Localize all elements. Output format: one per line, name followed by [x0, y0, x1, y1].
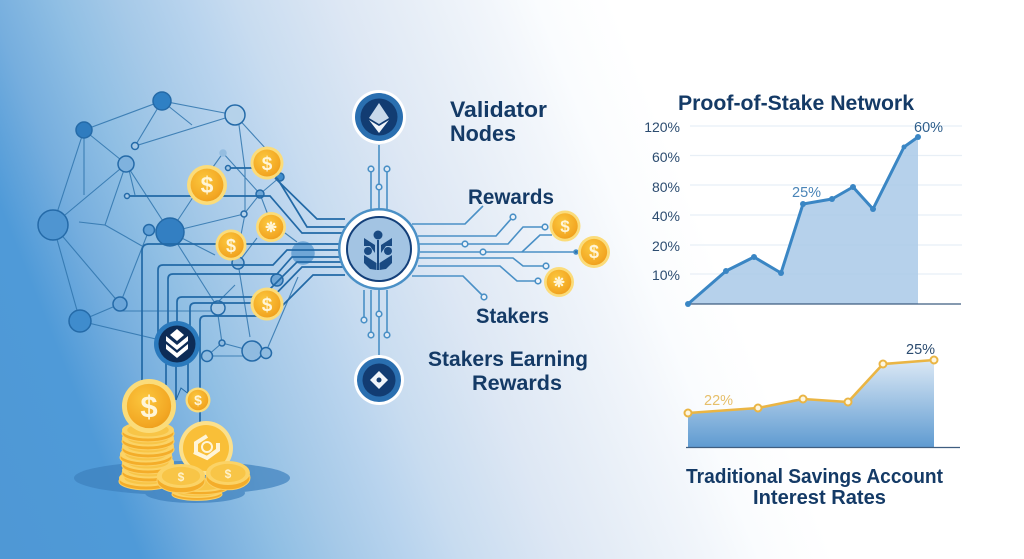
network graph — [38, 92, 314, 362]
hub sprout icon — [364, 230, 392, 270]
validator icon — [352, 90, 406, 144]
dark network node icon — [154, 321, 200, 367]
y axis labels: 120% — [644, 119, 680, 135]
flat coins — [157, 461, 250, 500]
emblem coin — [179, 421, 233, 475]
dollar coins on network: $ — [226, 236, 236, 256]
line series — [688, 360, 934, 413]
staker icon — [354, 355, 404, 405]
line series — [688, 137, 918, 304]
baseline — [686, 303, 961, 305]
proof-of-stake chart — [644, 92, 962, 307]
y axis labels — [644, 119, 680, 283]
label: validator nodes: Nodes — [450, 121, 516, 146]
reward coins: ❋ — [553, 274, 565, 290]
dollar coins on network: ❋ — [265, 219, 277, 235]
network edges — [53, 101, 298, 356]
savings chart — [684, 342, 960, 509]
reward coins — [544, 210, 610, 297]
chart title: Proof-of-Stake Network — [678, 92, 914, 115]
y axis labels: 20% — [652, 238, 680, 254]
large dollar coin: $ — [140, 389, 158, 424]
label: stakers earning rewards: Stakers Earning — [428, 348, 588, 371]
value label 60%: 60% — [914, 120, 943, 136]
large dollar coin — [122, 379, 176, 433]
reward coins: $ — [589, 242, 599, 262]
coin pile — [74, 379, 290, 503]
flat coins: $ — [225, 467, 232, 481]
dollar coins on network: $ — [262, 154, 273, 175]
value label 25%: 25% — [792, 185, 821, 201]
value label 22%: 22% — [704, 393, 733, 409]
label: stakers: Stakers — [476, 305, 549, 328]
y axis labels: 40% — [652, 208, 680, 224]
dollar coins on network: $ — [201, 172, 214, 198]
pile shadow — [74, 461, 290, 503]
small dollar coin — [186, 388, 210, 412]
label: validator nodes: Validator — [450, 97, 547, 122]
small dollar coin: $ — [194, 392, 202, 408]
y axis labels: 10% — [652, 267, 680, 283]
area fill — [688, 360, 934, 447]
y axis labels: 80% — [652, 179, 680, 195]
central hub — [338, 208, 420, 290]
data points — [684, 356, 938, 416]
dollar coins on network — [187, 146, 286, 320]
right circuit traces — [412, 206, 578, 300]
chart title: Interest Rates — [753, 487, 886, 509]
baseline — [686, 446, 960, 448]
y axis labels: 60% — [652, 149, 680, 165]
label: stakers earning rewards: Rewards — [472, 372, 562, 395]
dollar coins on network: $ — [262, 295, 273, 316]
grid lines — [690, 126, 962, 274]
circuit traces left — [130, 168, 345, 425]
label: rewards: Rewards — [468, 186, 554, 209]
data points — [685, 134, 921, 307]
reward coins: $ — [560, 217, 570, 236]
network nodes — [38, 92, 314, 362]
value label 25%: 25% — [906, 342, 935, 358]
chart title: Traditional Savings Account — [686, 466, 943, 488]
area fill — [688, 137, 918, 304]
vertical connectors — [361, 145, 390, 355]
flat coins: $ — [178, 470, 185, 484]
coin stack — [119, 422, 176, 490]
